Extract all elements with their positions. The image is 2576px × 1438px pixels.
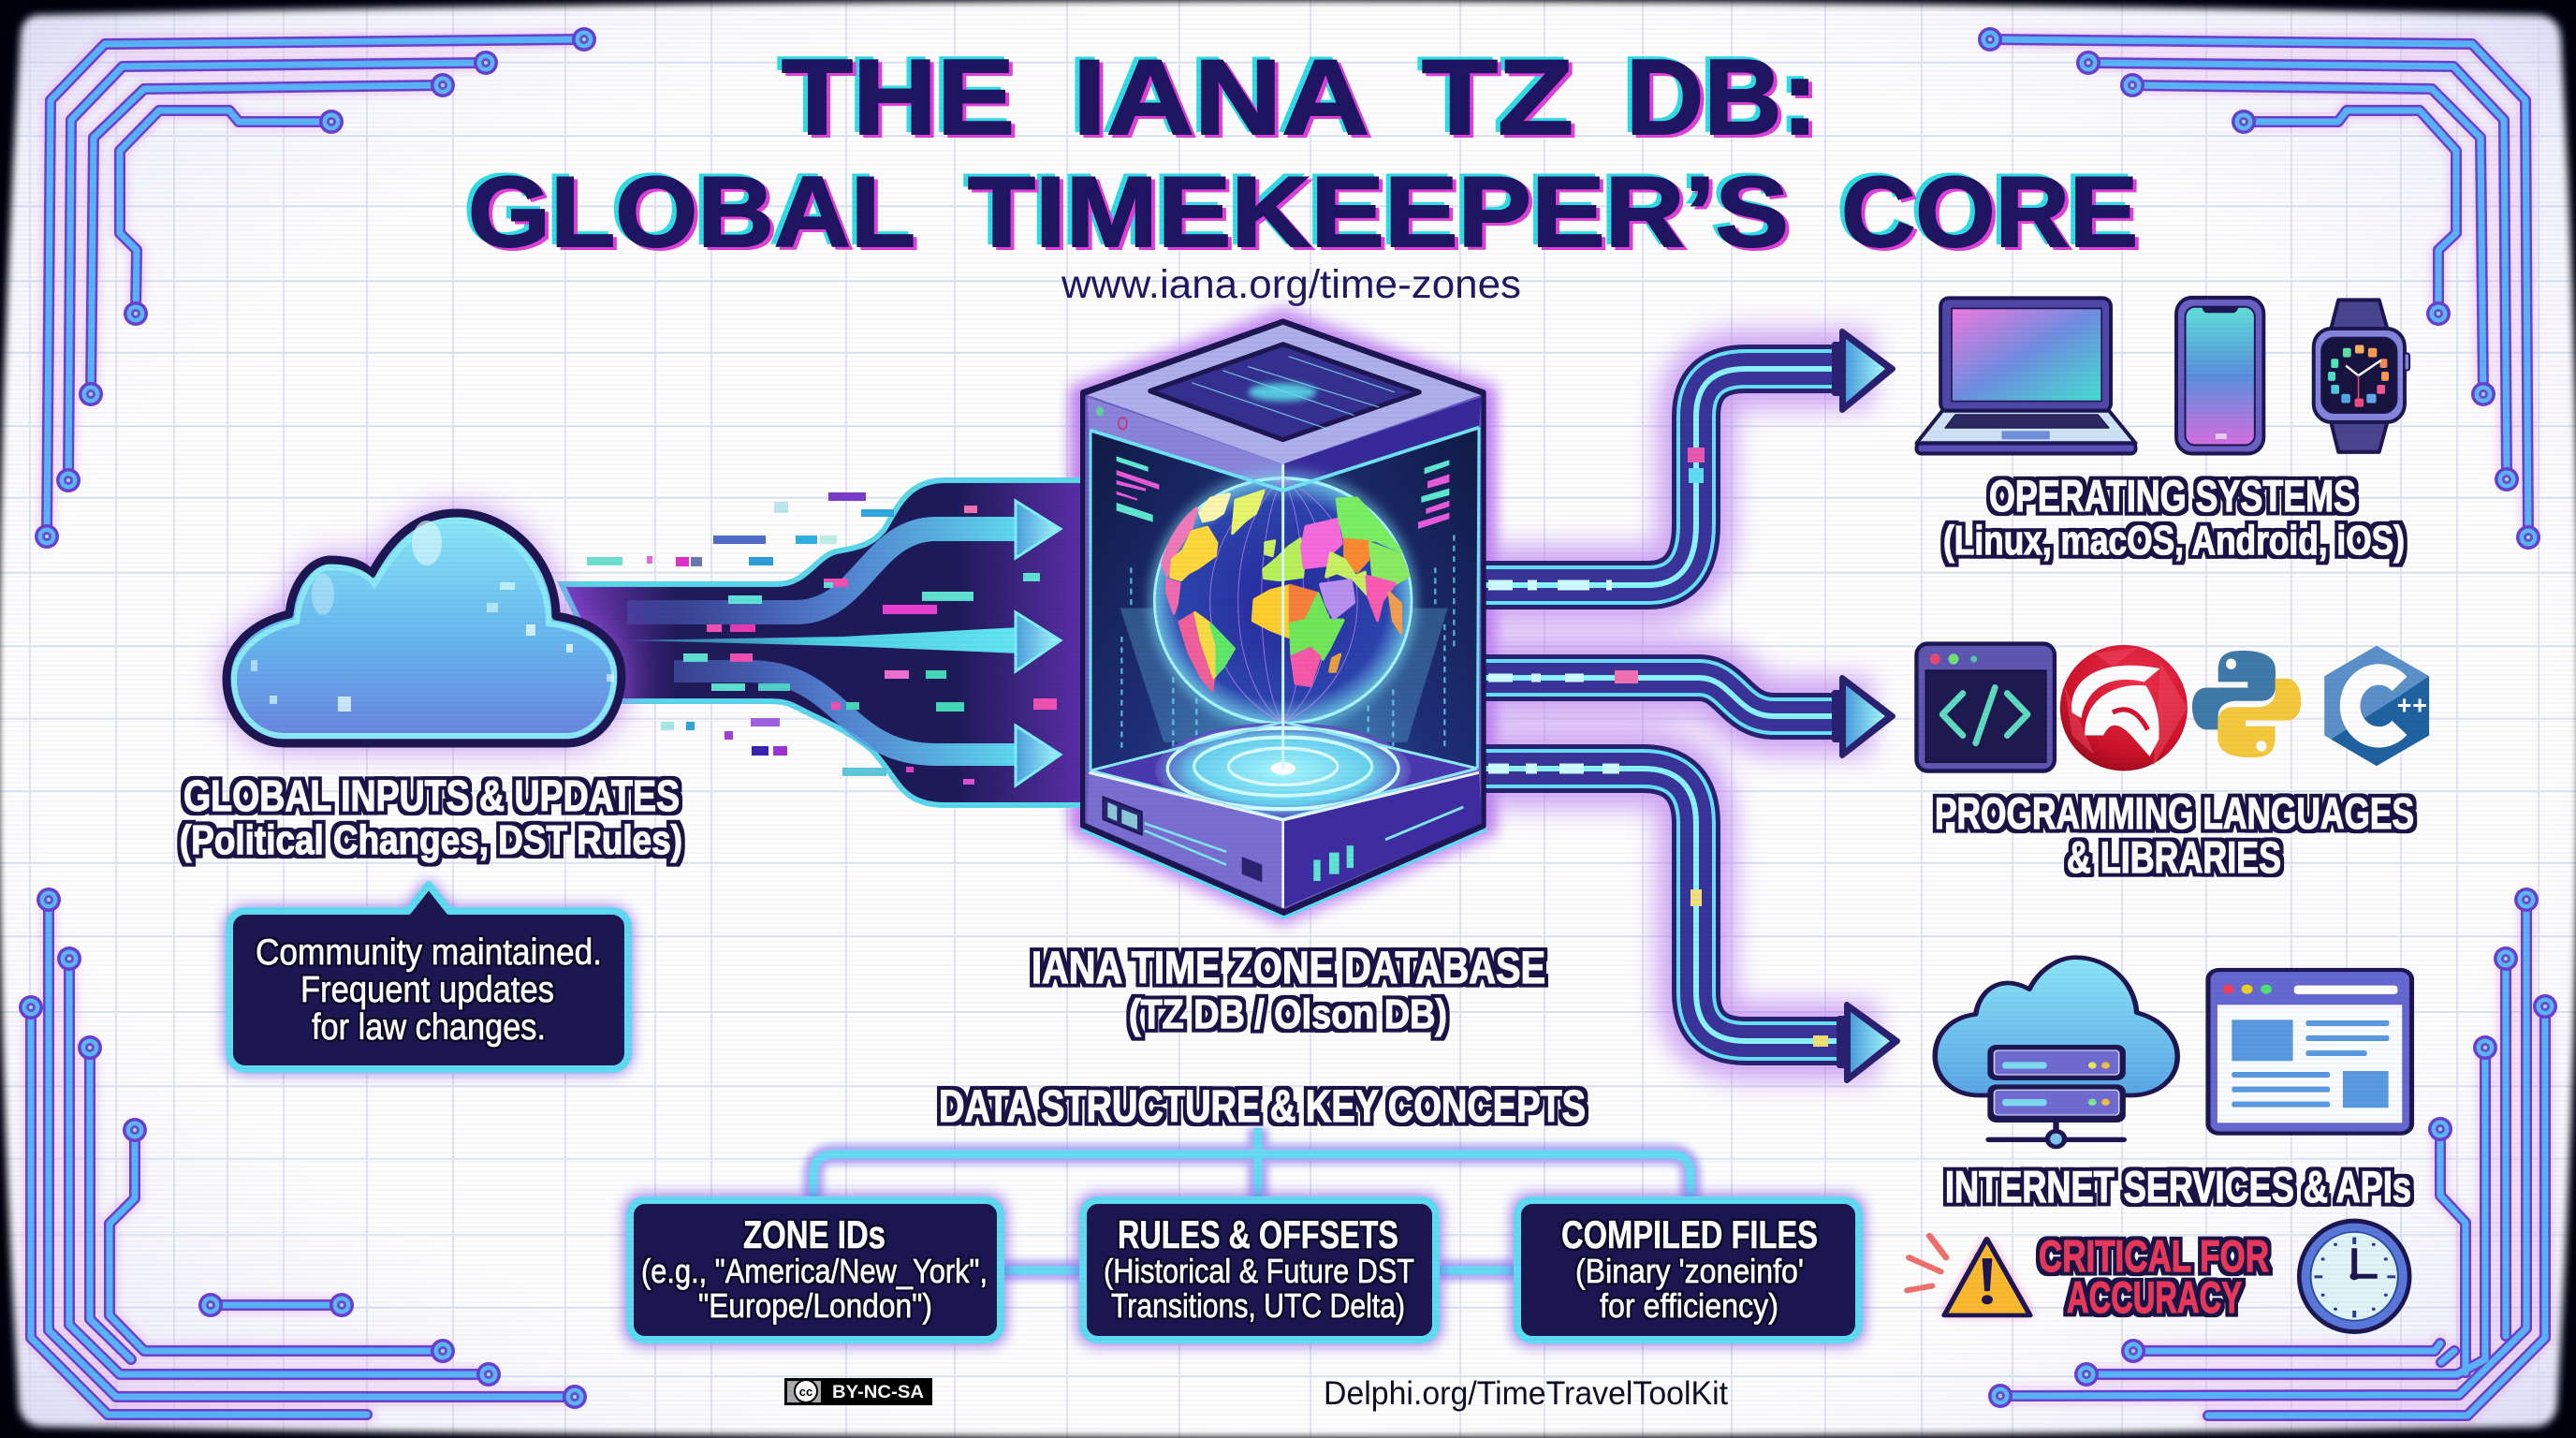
pipe: to operating systems	[1486, 331, 1893, 585]
label: global inputs: GLOBAL INPUTS & UPDATES	[183, 771, 680, 820]
card: compiled files: for efficiency)	[1600, 1286, 1778, 1325]
data stream band	[562, 480, 1090, 805]
incoming arrows	[627, 501, 1061, 785]
label: programming languages: PROGRAMMING LANGUAGES	[1935, 788, 2414, 838]
source url: www.iana.org/time-zones	[1061, 262, 1521, 307]
card: compiled files	[1512, 1195, 1865, 1345]
top face	[1088, 325, 1481, 464]
card: zone IDs: ZONE IDs	[743, 1212, 886, 1256]
cube glow	[1069, 308, 1498, 925]
label: IANA time zone database: (TZ DB / Olson DB)	[1129, 991, 1447, 1037]
icon: source cloud	[227, 513, 622, 743]
icon: phone	[2176, 298, 2263, 453]
holographic globe	[1149, 470, 1418, 731]
glass panes	[1091, 429, 1478, 770]
label: operating systems: OPERATING SYSTEMS	[1989, 471, 2356, 521]
callout: community maintained: Community maintained.	[256, 932, 602, 973]
cube body	[1083, 322, 1484, 913]
icon: ruby helmet sphere	[2060, 645, 2188, 770]
output pipes	[1486, 331, 1897, 1080]
base faces	[1088, 406, 1482, 908]
icon: cloud server	[1935, 958, 2177, 1149]
callout: community maintained: Frequent updates	[300, 970, 554, 1010]
icon: clock	[2297, 1219, 2411, 1334]
icon: c++ hexagon	[2324, 646, 2429, 766]
panel: global inputs	[180, 480, 1090, 1069]
card: rules and offsets: RULES & OFFSETS	[1118, 1212, 1398, 1256]
icon: code window	[1916, 644, 2055, 770]
label: global inputs	[180, 771, 682, 863]
base top with rings	[1090, 464, 1477, 819]
title: TZ	[1422, 38, 1573, 157]
base cyan edge	[1081, 829, 1486, 917]
top panel window	[1149, 345, 1420, 440]
card: compiled files: (Binary 'zoneinfo'	[1575, 1252, 1804, 1290]
panel: data structure	[624, 1082, 1865, 1345]
panel: operating systems	[1916, 298, 2409, 564]
label: critical for accuracy	[2039, 1231, 2269, 1322]
license badge: cc	[799, 1385, 812, 1399]
title	[468, 38, 2138, 268]
icon: smartwatch	[2314, 300, 2409, 452]
label: critical for accuracy: ACCURACY	[2067, 1272, 2242, 1322]
label: IANA time zone database: IANA TIME ZONE DATABASE	[1032, 944, 1545, 993]
icon: laptop	[1916, 298, 2136, 453]
label: operating systems	[1943, 471, 2405, 564]
card: rules and offsets	[1077, 1195, 1442, 1345]
label: IANA time zone database	[1032, 944, 1545, 1037]
label: programming languages	[1935, 788, 2414, 882]
icon: warning triangle	[1908, 1236, 2032, 1315]
card: zone IDs: "Europe/London")	[698, 1286, 932, 1325]
title: GLOBAL	[468, 155, 915, 268]
panel: critical for accuracy	[1908, 1219, 2411, 1334]
pipe: to programming languages	[1486, 670, 1893, 756]
title: IANA	[1073, 38, 1369, 157]
connector tree	[813, 1128, 1690, 1270]
continents	[1163, 492, 1409, 690]
label: operating systems: (Linux, macOS, Android, iOS)	[1943, 518, 2405, 564]
card: rules and offsets: (Historical & Future DST	[1104, 1252, 1414, 1290]
label: programming languages: & LIBRARIES	[2067, 832, 2281, 882]
footer link: Delphi.org/TimeTravelToolKit	[1324, 1375, 1728, 1412]
title: DB:	[1626, 38, 1818, 157]
card: zone IDs: (e.g., "America/New_York",	[641, 1252, 988, 1290]
label: critical for accuracy: CRITICAL FOR	[2039, 1231, 2269, 1281]
panel: programming languages	[1916, 644, 2429, 882]
license badge: BY-NC-SA	[832, 1383, 924, 1402]
icon: database cube	[1081, 322, 1486, 917]
card: zone IDs	[624, 1195, 1006, 1345]
panel: internet services	[1935, 958, 2411, 1211]
card: compiled files: COMPILED FILES	[1561, 1212, 1818, 1256]
title: THE	[782, 38, 1015, 157]
icon: python	[2192, 651, 2301, 757]
license badge	[784, 1378, 932, 1405]
label: global inputs: (Political Changes, DST Rules)	[180, 817, 682, 863]
label: internet services: INTERNET SERVICES & APIs	[1945, 1162, 2411, 1211]
heading: data structure: DATA STRUCTURE & KEY CONCEPTS	[939, 1082, 1586, 1132]
data fragments	[587, 492, 1057, 785]
callout: community maintained	[229, 885, 628, 1069]
icon: c++ hexagon: ++	[2397, 690, 2428, 719]
card: rules and offsets: Transitions, UTC Delta)	[1111, 1286, 1405, 1325]
pipe: to internet services	[1486, 769, 1897, 1080]
title: CORE	[1841, 155, 2138, 268]
title: TIMEKEEPER’S	[968, 155, 1789, 268]
callout: community maintained: for law changes.	[312, 1007, 546, 1048]
icon: browser window	[2208, 970, 2411, 1134]
